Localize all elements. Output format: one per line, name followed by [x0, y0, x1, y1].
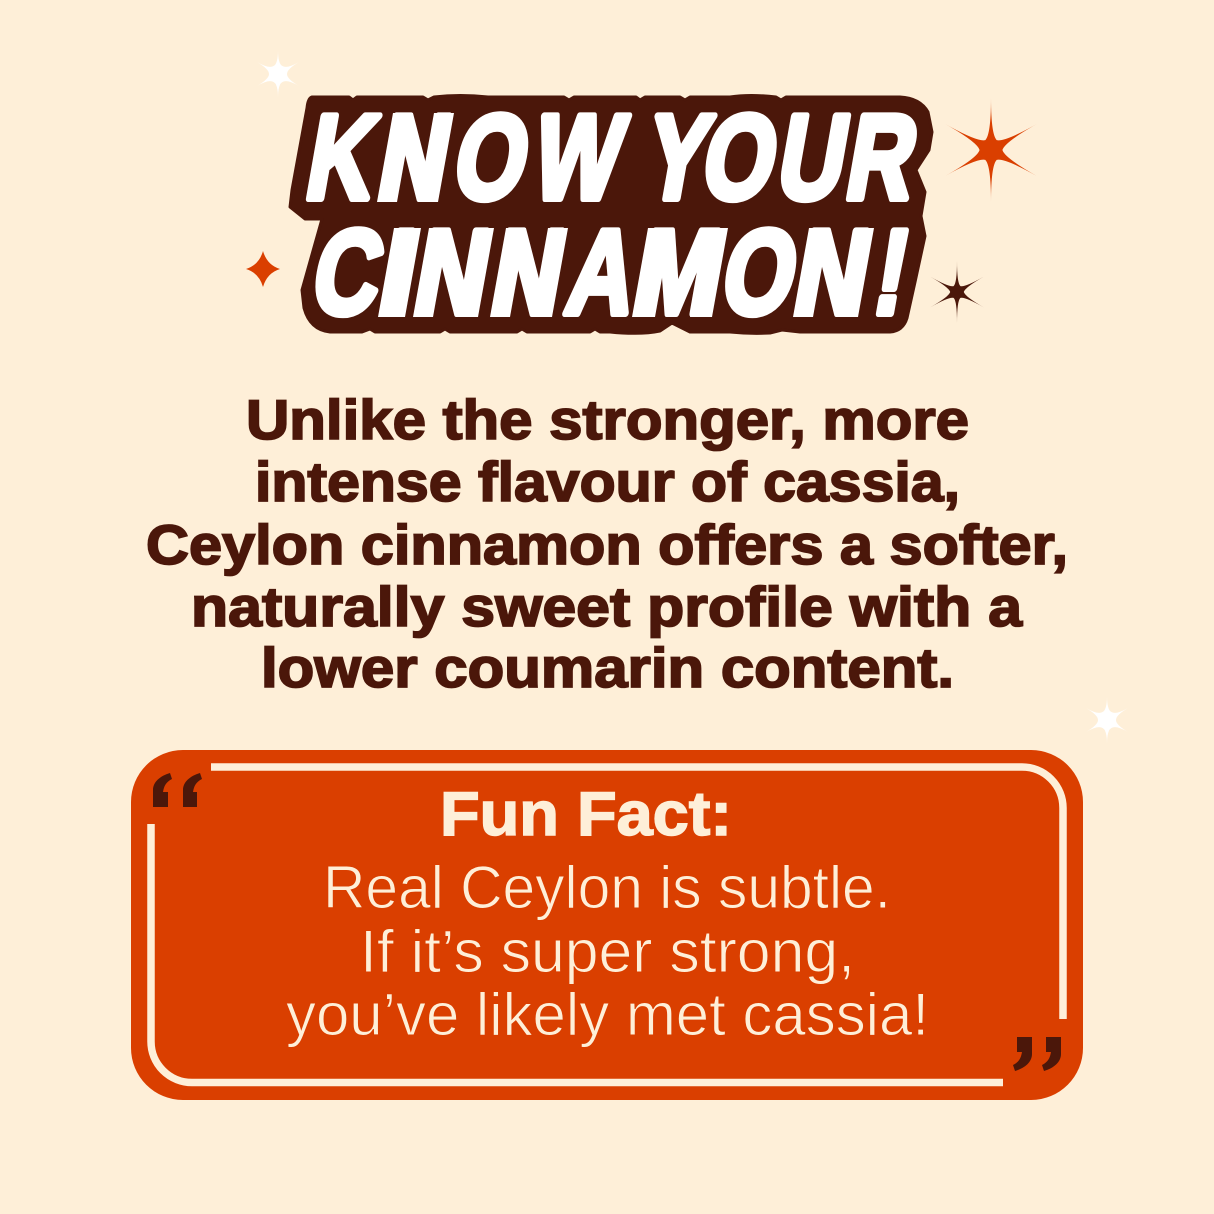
- text block: intro paragraph: Ceylon cinnamon offers a softer,: [146, 513, 1068, 576]
- text block: fun fact body: [286, 854, 929, 1048]
- title lettering: KNOW YOUR: [298, 90, 927, 224]
- text block: intro paragraph: lower coumarin content.: [261, 636, 954, 699]
- text block: fun fact body: If it’s super strong,: [360, 918, 855, 985]
- title: Know Your Cinnamon!: [290, 90, 932, 339]
- icon: dark sparkle: [930, 261, 984, 323]
- icon: small orange sparkle: [246, 251, 280, 287]
- text block: fun fact body: you’ve likely met cassia!: [286, 981, 929, 1048]
- icon: white sparkle right: [1086, 696, 1128, 744]
- icon: opening quote mark: [153, 773, 202, 807]
- text block: fun fact body: Real Ceylon is subtle.: [323, 854, 891, 921]
- text block: intro paragraph: [146, 388, 1068, 699]
- icon: white sparkle top left: [257, 50, 299, 98]
- text block: intro paragraph: Unlike the stronger, more: [246, 388, 969, 451]
- icon: large orange sparkle: [945, 98, 1037, 202]
- panel: fun fact: [131, 750, 1083, 1100]
- icon: closing quote mark: [1013, 1037, 1061, 1071]
- title lettering: CINNAMON!: [304, 205, 919, 339]
- title dark backing shape: [290, 96, 932, 333]
- title lettering: [298, 90, 927, 339]
- text block: intro paragraph: naturally sweet profile with a: [191, 575, 1023, 638]
- text block: intro paragraph: intense flavour of cassia,: [255, 450, 960, 513]
- panel background: [131, 750, 1083, 1100]
- panel inner border: [151, 767, 1063, 1082]
- heading: Fun Fact: Fun Fact:: [440, 780, 732, 849]
